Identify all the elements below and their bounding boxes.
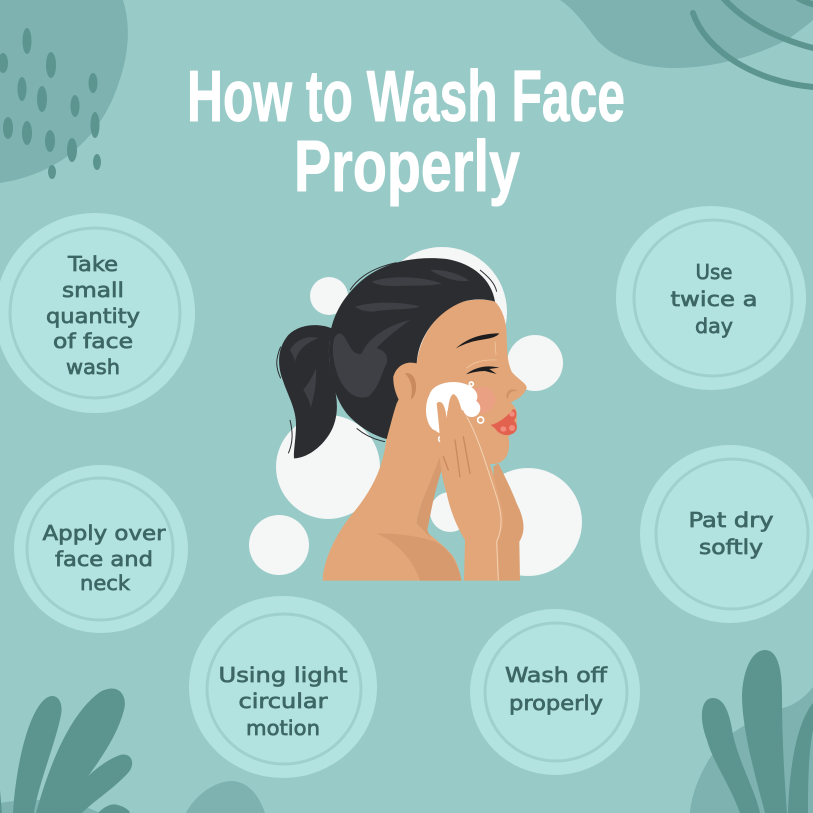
closed eye — [466, 342, 499, 374]
face — [417, 300, 527, 464]
step: apply over face and neck: Apply over — [42, 521, 166, 545]
step: using light circular motion: motion — [246, 716, 320, 740]
step: use twice a day: day — [695, 314, 733, 338]
step: take small quantity: small — [62, 278, 124, 302]
step: take small quantity — [0, 213, 195, 413]
step: wash off properly: Wash off — [505, 663, 608, 687]
step: pat dry softly — [640, 445, 813, 623]
decoration: top-right blob and curved lines — [560, 0, 813, 87]
foam bubbles — [439, 382, 484, 442]
neck shadow — [417, 457, 444, 538]
ponytail — [277, 325, 337, 458]
shoulder shadow — [376, 533, 462, 581]
decoration: bottom-left plant — [0, 688, 265, 813]
ear — [393, 363, 424, 415]
step: pat dry softly: softly — [699, 535, 763, 559]
step: using light circular motion — [189, 596, 377, 778]
step: apply over face and neck: face and — [55, 547, 153, 571]
decoration: top-left blob with dashes — [0, 0, 128, 183]
step: use twice a day: Use — [696, 260, 732, 284]
foam — [426, 382, 480, 433]
soap bubbles background — [249, 247, 582, 576]
step: apply over face and neck — [14, 465, 188, 633]
title: How to Wash Face — [187, 57, 625, 137]
step: take small quantity: wash — [66, 355, 120, 379]
eyebrow — [456, 333, 499, 348]
step: use twice a day: twice a — [670, 287, 758, 311]
cheek blush — [468, 387, 496, 413]
title — [187, 57, 625, 207]
step: pat dry softly: Pat dry — [688, 508, 774, 532]
step: apply over face and neck: neck — [80, 571, 130, 595]
far hand — [493, 463, 523, 581]
step: use twice a day — [616, 206, 806, 390]
step: using light circular motion: Using light — [218, 663, 348, 687]
front hand — [437, 394, 503, 581]
neck and shoulders — [323, 380, 462, 581]
decoration: bottom-right plant — [690, 650, 813, 813]
step: take small quantity: Take — [67, 252, 118, 276]
step: take small quantity: of face — [53, 329, 133, 353]
nose line — [506, 389, 518, 398]
step: using light circular motion: circular — [238, 689, 328, 713]
step: take small quantity: quantity — [46, 304, 140, 328]
hair — [329, 258, 497, 442]
woman washing face illustration — [277, 258, 527, 581]
step: wash off properly — [470, 609, 640, 775]
step: wash off properly: properly — [509, 691, 603, 715]
lips — [491, 409, 517, 435]
title: Properly — [294, 127, 520, 207]
